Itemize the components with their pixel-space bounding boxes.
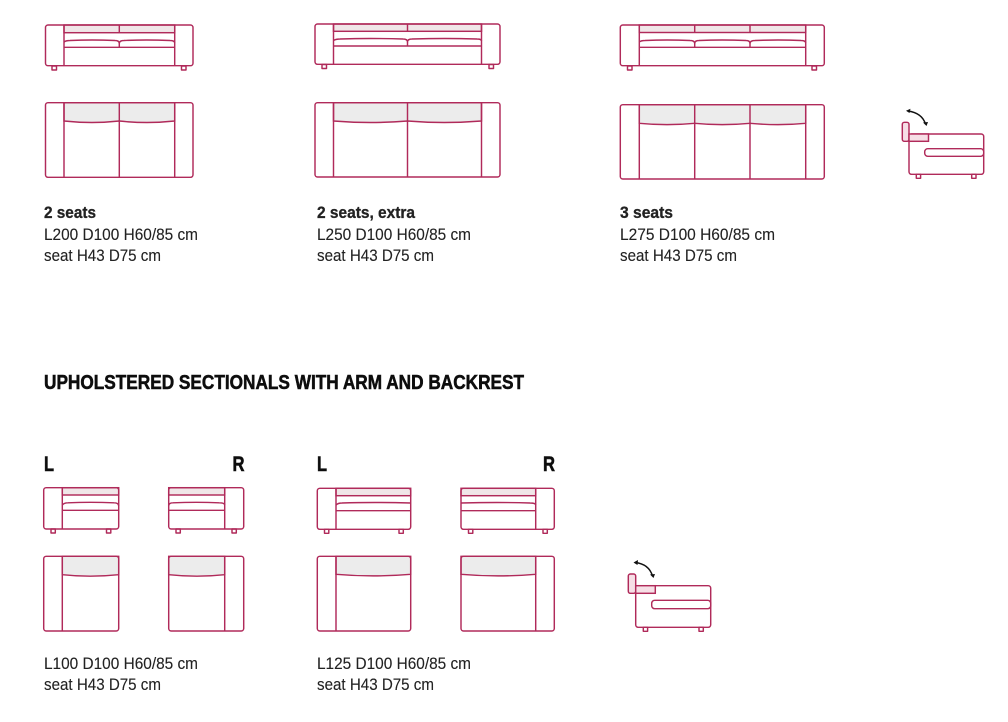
label: R: R [543,453,555,476]
icon: 2 seats extra top view [315,103,500,177]
arrow: tilt direction [906,109,928,126]
text: 100 cm module dimensions: L100 D100 H60/85 cm [44,654,198,673]
panel: 3 seats sofa [620,25,824,265]
icon: sofa side view with tilting headrest [902,109,984,178]
icon: 2 seats extra front view [315,24,500,68]
icon: 2 seats top view [46,103,193,177]
icon: right module top view [461,556,554,631]
text: 125 cm module dimensions: L125 D100 H60/85 cm [317,654,471,673]
text: 125 cm module dimensions [317,654,471,694]
text: 100 cm module dimensions [44,654,198,694]
icon: right module front view [169,488,244,533]
icon: left module front view [317,488,411,533]
panel: 2 seats extra sofa [315,24,500,265]
text: 100 cm module dimensions: seat H43 D75 cm [44,675,161,694]
icon: 3 seats front view [620,25,824,70]
text: 2 seats extra dimensions: seat H43 D75 cm [317,246,434,265]
arrow: tilt direction [634,560,655,578]
icon: 2 seats front view [46,25,193,70]
text: 2 seats dimensions: seat H43 D75 cm [44,246,161,265]
text: 2 seats dimensions: 2 seats [44,203,96,222]
label: L: L [317,453,327,476]
heading: upholstered sectionals: UPHOLSTERED SECTIONALS WITH ARM AND BACKREST [44,372,524,394]
panel: sectionals 100 cm [44,453,245,694]
icon: left module front view [44,488,119,533]
text: 3 seats dimensions: 3 seats [620,203,673,222]
icon: sectional side view with tilting headrest [628,560,711,631]
icon: right module top view [169,556,244,631]
text: 3 seats dimensions: seat H43 D75 cm [620,246,737,265]
icon: left module top view [44,556,119,631]
icon: 3 seats top view [620,105,824,179]
label: L: L [44,453,54,476]
panel: sectionals 125 cm [317,453,555,694]
icon: left module top view [317,556,411,631]
text: 125 cm module dimensions: seat H43 D75 cm [317,675,434,694]
icon: right module front view [461,488,554,533]
text: 2 seats dimensions [44,203,198,265]
text: 3 seats dimensions [620,203,775,265]
panel: 2 seats sofa [44,25,198,265]
text: 2 seats extra dimensions: L250 D100 H60/85 cm [317,225,471,244]
text: 2 seats extra dimensions [317,203,471,265]
label: R: R [232,453,244,476]
text: 3 seats dimensions: L275 D100 H60/85 cm [620,225,775,244]
text: 2 seats extra dimensions: 2 seats, extra [317,203,415,222]
text: 2 seats dimensions: L200 D100 H60/85 cm [44,225,198,244]
